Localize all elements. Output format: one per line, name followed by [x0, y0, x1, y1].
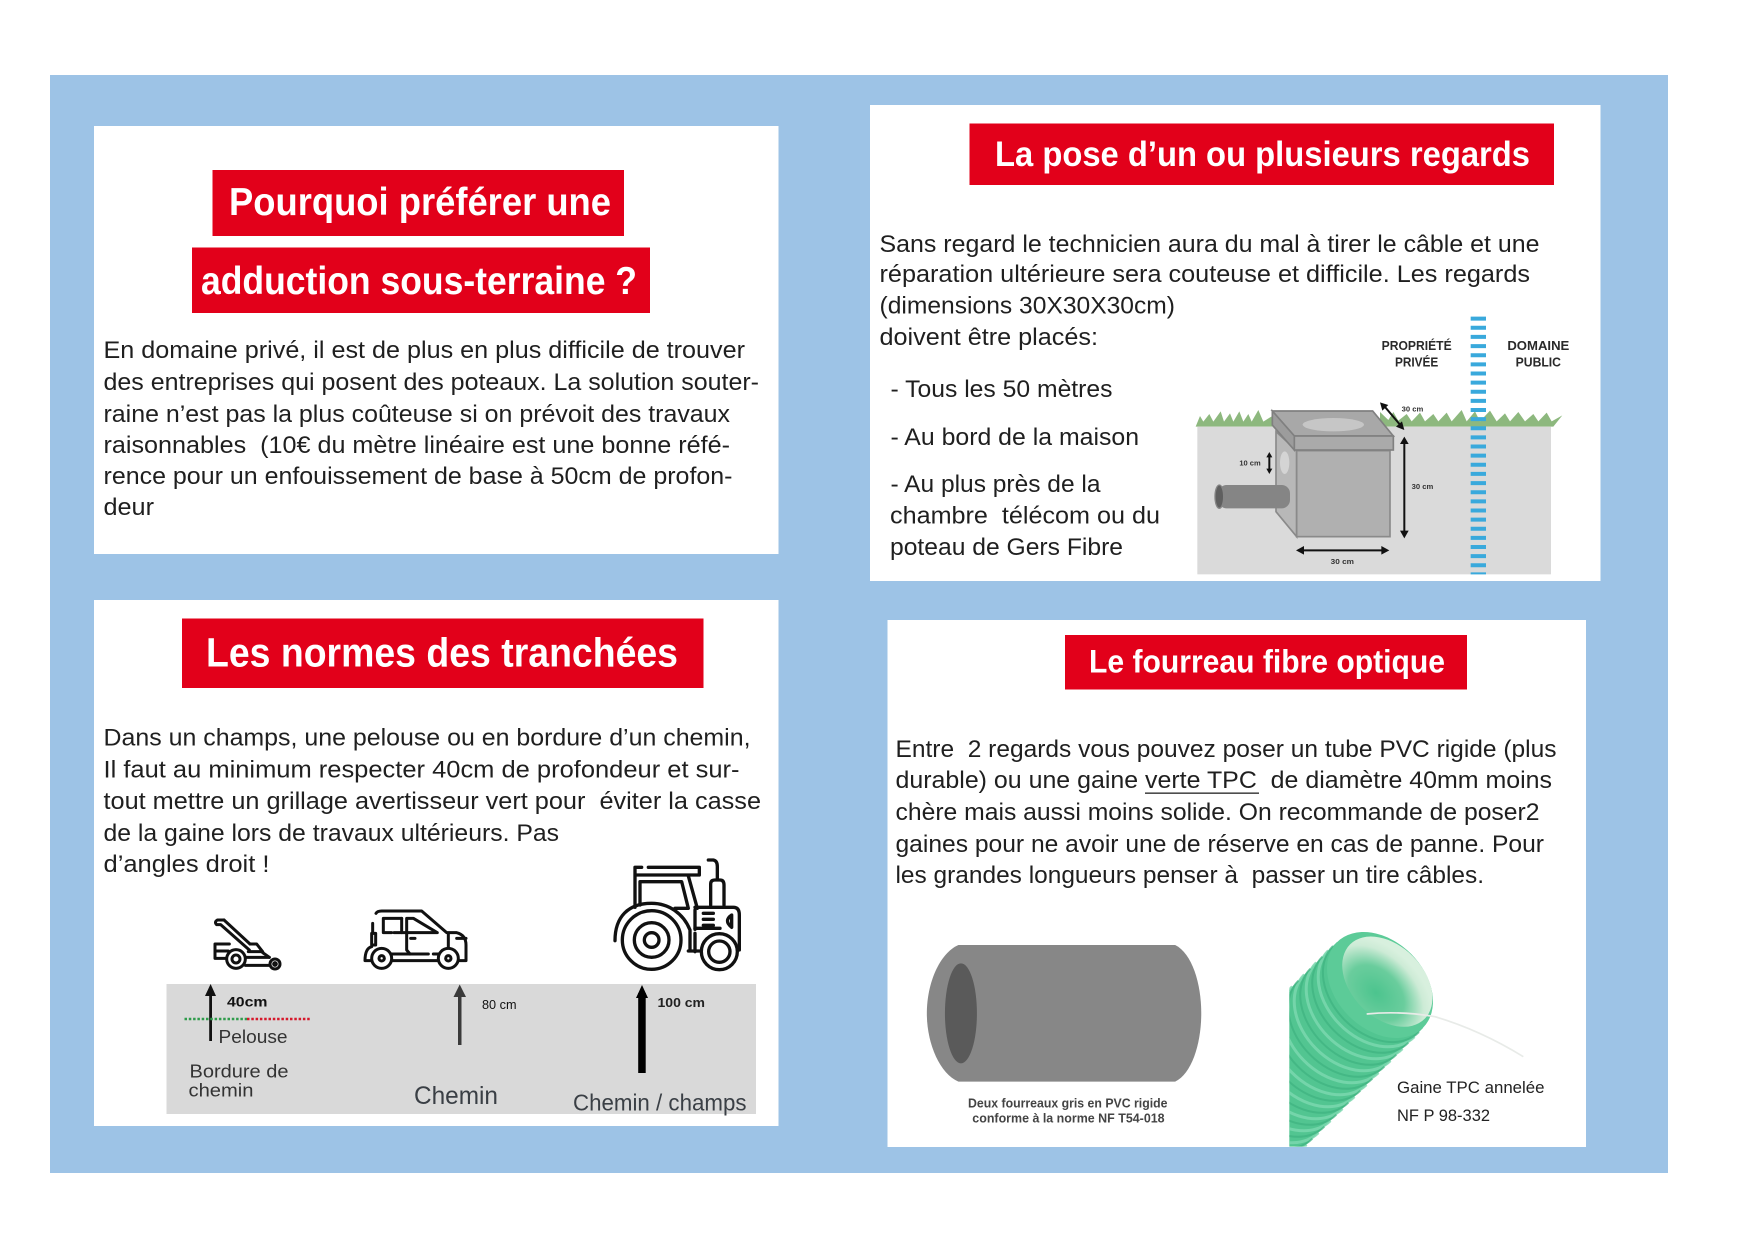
text block: dans un champs: de la gaine lors de travaux ultérieurs. Pas: [104, 820, 559, 847]
text block: sans regard: (dimensions 30X30X30cm): [880, 292, 1175, 320]
caption: fourreaux gris: conforme à la norme NF T54-018: [972, 1112, 1165, 1126]
text block: entre 2 regards: [896, 736, 1556, 889]
caption: fourreaux gris: [968, 1096, 1168, 1126]
list: emplacements des regards: [890, 376, 1160, 561]
heading: Les normes des tranchées: [182, 618, 704, 688]
diagram: regard en coupe: [1196, 317, 1569, 574]
panel: pourquoi préférer une adduction sous-terraine: [94, 126, 778, 554]
list: emplacements des regards: - Au bord de la maison: [890, 424, 1139, 451]
heading: La pose d'un ou plusieurs regards: La pose d’un ou plusieurs regards: [995, 135, 1530, 174]
arrow: 40 cm: [205, 984, 216, 1041]
heading: Pourquoi préférer une adduction sous-terraine: Pourquoi préférer une: [229, 181, 611, 224]
chart: profondeurs de tranchée: [166, 984, 756, 1116]
label: Pelouse: Pelouse: [218, 1027, 288, 1047]
illustration: fourreau gris PVC: [927, 945, 1201, 1082]
label: Bordure de chemin: chemin: [188, 1080, 254, 1100]
illustration: gaine TPC verte: [1289, 932, 1524, 1147]
text block: dans un champs: d’angles droit !: [104, 851, 270, 878]
list: emplacements des regards: - Au plus près de la: [890, 471, 1101, 498]
labels: propriété privée / domaine public: PRIVÉE: [1395, 355, 1438, 370]
arrows: dimensions: [1266, 402, 1409, 555]
heading: Pourquoi préférer une adduction sous-terraine: adduction sous-terraine ?: [201, 260, 637, 303]
text block: domaine privé: raine n’est pas la plus coûteuse si on prévoit des travaux: [104, 401, 730, 428]
text block: entre 2 regards: Entre 2 regards vous pouvez poser un tube PVC rigide (plus: [896, 736, 1556, 763]
text block: dans un champs: Dans un champs, une pelouse ou en bordure d’un chemin,: [104, 724, 750, 752]
heading: Le fourreau fibre optique: Le fourreau fibre optique: [1089, 644, 1445, 680]
text block: dans un champs: Il faut au minimum respecter 40cm de profondeur et sur-: [104, 756, 740, 784]
text block: domaine privé: raisonnables (10€ du mètre linéaire est une bonne réfé-: [104, 432, 730, 459]
text block: domaine privé: rence pour un enfouissement de base à 50cm de profon-: [104, 463, 733, 490]
text block: entre 2 regards: gaines pour ne avoir une de réserve en cas de panne. Pour: [896, 831, 1544, 858]
dimension labels: 10 cm: [1239, 459, 1261, 468]
dimension labels: 30 cm: [1412, 482, 1434, 491]
icon: voiture: [365, 911, 466, 968]
panel: la pose d'un ou plusieurs regards: [870, 105, 1600, 581]
text block: entre 2 regards: durable) ou une gaine verte TPC de diamètre 40mm moins: [896, 767, 1552, 794]
caption: fourreaux gris: Deux fourreaux gris en PVC rigide: [968, 1096, 1168, 1110]
list: emplacements des regards: poteau de Gers Fibre: [890, 534, 1123, 561]
icon: tondeuse: [215, 920, 280, 969]
text block: sans regard: doivent être placés:: [880, 324, 1098, 351]
caption: gaine TPC: Gaine TPC annelée: [1397, 1078, 1544, 1097]
icon: tracteur: [615, 860, 739, 970]
labels: propriété privée / domaine public: PROPRIÉTÉ: [1382, 338, 1452, 353]
labels: propriété privée / domaine public: DOMAINE: [1507, 338, 1569, 353]
label: Chemin: Chemin: [414, 1082, 498, 1110]
panel: le fourreau fibre optique: [888, 620, 1586, 1161]
text block: domaine privé: deur: [104, 494, 154, 521]
text block: domaine privé: [104, 337, 759, 521]
text block: entre 2 regards: chère mais aussi moins solide. On recommande de poser2: [896, 799, 1540, 826]
text block: dans un champs: tout mettre un grillage avertisseur vert pour éviter la casse: [104, 788, 761, 815]
icon: boîtier du regard: [1215, 411, 1393, 537]
label: 100 cm: 100 cm: [658, 995, 705, 1010]
label: 80 cm: 80 cm: [482, 997, 516, 1012]
heading: La pose d'un ou plusieurs regards: [970, 124, 1554, 185]
list: emplacements des regards: chambre télécom ou du: [890, 502, 1160, 530]
dimension labels: 30 cm: [1402, 405, 1424, 414]
text block: sans regard: réparation ultérieure sera couteuse et difficile. Les regards: [880, 261, 1530, 288]
label: Bordure de chemin: Bordure de: [190, 1062, 288, 1082]
heading: Pourquoi préférer une adduction sous-terraine: [192, 170, 650, 313]
list: emplacements des regards: - Tous les 50 mètres: [890, 376, 1112, 403]
label: Chemin / champs: Chemin / champs: [573, 1090, 746, 1116]
text block: dans un champs: [104, 724, 761, 878]
arrow: 80 cm: [454, 984, 466, 1045]
text block: sans regard: Sans regard le technicien aura du mal à tirer le câble et une: [880, 231, 1540, 258]
label: Bordure de chemin: [188, 1062, 288, 1100]
limite de propriété: [1455, 317, 1501, 574]
heading: Le fourreau fibre optique: [1065, 635, 1467, 690]
arrow: 100 cm: [636, 985, 648, 1073]
text block: domaine privé: des entreprises qui posent des poteaux. La solution souter-: [104, 369, 759, 396]
label: 40cm: 40cm: [227, 994, 268, 1010]
dimension labels: [1239, 405, 1434, 566]
grillage avertisseur: [184, 1018, 310, 1020]
text block: sans regard: [880, 231, 1540, 351]
text block: entre 2 regards: les grandes longueurs penser à passer un tire câbles.: [896, 862, 1484, 889]
labels: propriété privée / domaine public: PUBLIC: [1516, 355, 1561, 370]
text block: domaine privé: En domaine privé, il est de plus en plus difficile de trouver: [104, 337, 745, 364]
panel: les normes des tranchées: [94, 600, 778, 1126]
heading: Les normes des tranchées: Les normes des tranchées: [206, 630, 678, 676]
labels: propriété privée / domaine public: [1382, 338, 1569, 370]
caption: gaine TPC: NF P 98-332: [1397, 1106, 1490, 1125]
dimension labels: 30 cm: [1331, 557, 1355, 566]
caption: gaine TPC: [1397, 1078, 1544, 1125]
